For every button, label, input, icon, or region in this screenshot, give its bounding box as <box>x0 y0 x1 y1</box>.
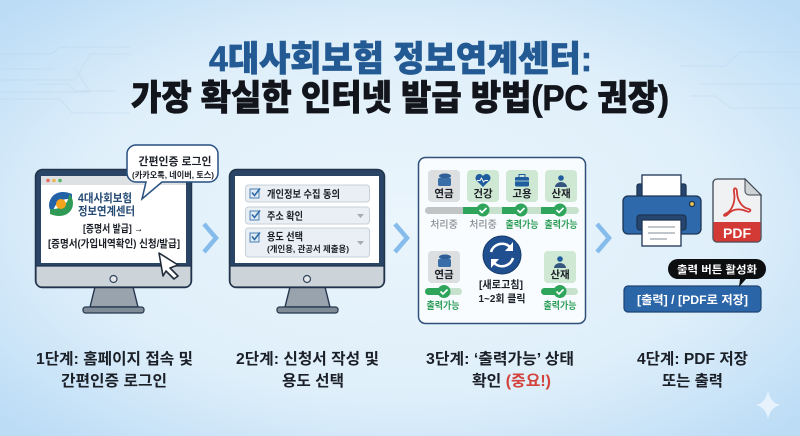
caption: step 2: 2단계: 신청서 작성 및 <box>236 350 379 368</box>
callout: print button activated <box>668 259 766 287</box>
form row: purpose selection <box>246 228 370 257</box>
panel: step 1 monitor <box>36 145 218 313</box>
status card: pension, processing: 연금 <box>434 187 454 200</box>
status card: industrial accident, ready <box>544 251 576 283</box>
toggle: pension ready <box>425 285 462 298</box>
form row: address check <box>246 207 370 224</box>
arrow: step 1 to 2 <box>204 224 216 252</box>
logo name text: 4대사회보험 <box>78 191 132 205</box>
caption: step 2: 용도 선택 <box>282 372 344 390</box>
caption: step 3 <box>426 350 574 390</box>
callout: simple authentication login: 간편인증 로그인 <box>138 155 212 168</box>
form row: purpose selection: (개인용, 관공서 제출용) <box>267 244 349 254</box>
icon: PDF file: PDF <box>723 225 751 241</box>
caption: step 1: 간편인증 로그인 <box>61 372 167 390</box>
form row: purpose selection: 용도 선택 <box>267 230 303 243</box>
status labels: 출력가능 <box>544 218 578 231</box>
button: print or save as PDF: [출력] / [PDF로 저장] <box>637 292 748 307</box>
caption: step 2 <box>236 350 379 390</box>
title <box>131 40 669 118</box>
progress bar with checks <box>425 204 579 216</box>
refresh instruction text: [새로고침] <box>479 278 523 291</box>
status labels: 처리중 <box>469 219 497 231</box>
status card: employment: 고용 <box>512 188 532 200</box>
caption: step 4 <box>637 350 748 390</box>
form row: privacy consent <box>246 185 370 202</box>
toggle: industrial accident ready <box>541 285 578 298</box>
status card: health <box>467 170 499 202</box>
panel: step 3 status board <box>418 158 586 324</box>
caption: step 3: 3단계: ‘출력가능’ 상태 <box>426 350 574 368</box>
callout: simple authentication login: (카카오톡, 네이버, 토스) <box>132 170 214 180</box>
arrow: step 2 to 3 <box>395 224 407 252</box>
icon: sparkle <box>756 391 780 419</box>
status labels <box>430 218 578 231</box>
icon: mouse cursor <box>159 253 178 279</box>
caption: step 3: 확인 (중요!) <box>472 372 551 390</box>
status card: pension, ready <box>428 251 460 283</box>
status card: health: 건강 <box>473 188 493 200</box>
status labels: 출력가능 <box>506 218 538 231</box>
ready labels: 출력가능 <box>544 299 576 312</box>
status card: industrial accident, ready: 산재 <box>550 268 570 281</box>
button: print or save as PDF <box>624 286 761 312</box>
status card: industrial accident <box>545 170 577 202</box>
caption: step 1: 1단계: 홈페이지 접속 및 <box>36 350 193 368</box>
ready labels <box>426 299 576 312</box>
menu path text <box>48 222 180 250</box>
menu path text: [증명서 발급] → <box>83 222 143 235</box>
status card: pension, processing <box>428 170 460 202</box>
icon: PDF file <box>713 179 761 242</box>
callout: print button activated: 출력 버튼 활성화 <box>677 263 757 276</box>
status card: employment <box>506 170 538 202</box>
menu path text: [증명서(가입내역확인) 신청/발급] <box>48 237 180 250</box>
caption: step 4: 또는 출력 <box>662 372 723 390</box>
callout: simple authentication login <box>127 145 218 199</box>
status labels: 처리중 <box>430 219 458 231</box>
arrow: step 3 to 4 <box>597 224 609 252</box>
caption: step 4: 4단계: PDF 저장 <box>637 350 748 368</box>
refresh instruction text: 1~2회 클릭 <box>478 292 526 305</box>
logo name text <box>78 191 135 218</box>
icon: printer <box>623 175 701 246</box>
form row: privacy consent: 개인정보 수집 동의 <box>267 188 340 200</box>
form row: address check: 주소 확인 <box>267 210 303 222</box>
caption: step 1 <box>36 350 193 390</box>
ready labels: 출력가능 <box>426 299 460 312</box>
title: 4대사회보험 정보연계센터: <box>209 40 592 79</box>
status card: industrial accident: 산재 <box>551 187 571 200</box>
refresh instruction text <box>478 278 526 305</box>
logo name text: 정보연계센터 <box>78 204 135 218</box>
status card: pension, ready: 연금 <box>434 268 454 281</box>
title: 가장 확실한 인터넷 발급 방법(PC 권장) <box>131 79 669 118</box>
panel: step 2 monitor <box>230 170 384 313</box>
icon: refresh button <box>483 236 521 274</box>
icon: insurance logo <box>49 192 73 216</box>
